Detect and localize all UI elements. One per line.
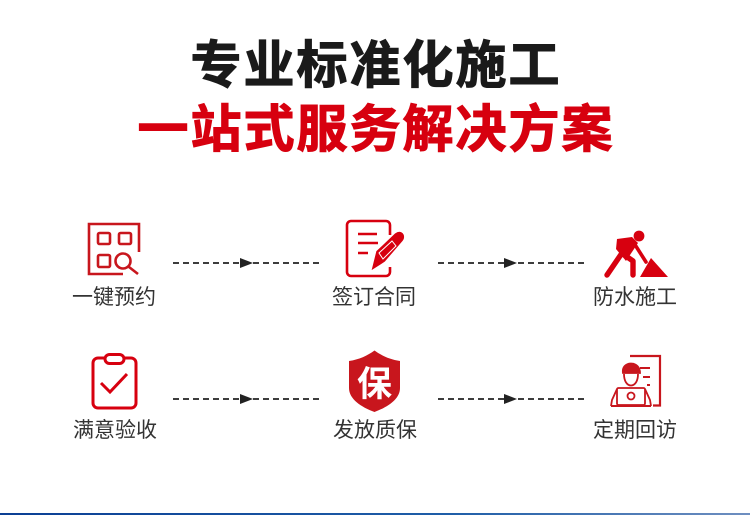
label: sign contract: 签订合同	[332, 286, 416, 309]
arrow 2	[438, 258, 584, 268]
label: follow-up visit: 定期回访	[593, 419, 677, 442]
bottom blue bar	[0, 513, 750, 515]
icon: warranty shield: 保	[357, 365, 392, 404]
title line 2: 一站式服务解决方案	[137, 101, 614, 158]
arrow 1	[173, 258, 319, 268]
label: acceptance: 满意验收	[73, 419, 157, 442]
arrow 3	[173, 394, 319, 404]
label: waterproofing: 防水施工	[593, 286, 677, 309]
arrow 4	[438, 394, 584, 404]
label: issue warranty: 发放质保	[333, 419, 417, 442]
label: one-click booking: 一键预约	[72, 286, 156, 309]
title line 1: 专业标准化施工	[190, 37, 562, 94]
